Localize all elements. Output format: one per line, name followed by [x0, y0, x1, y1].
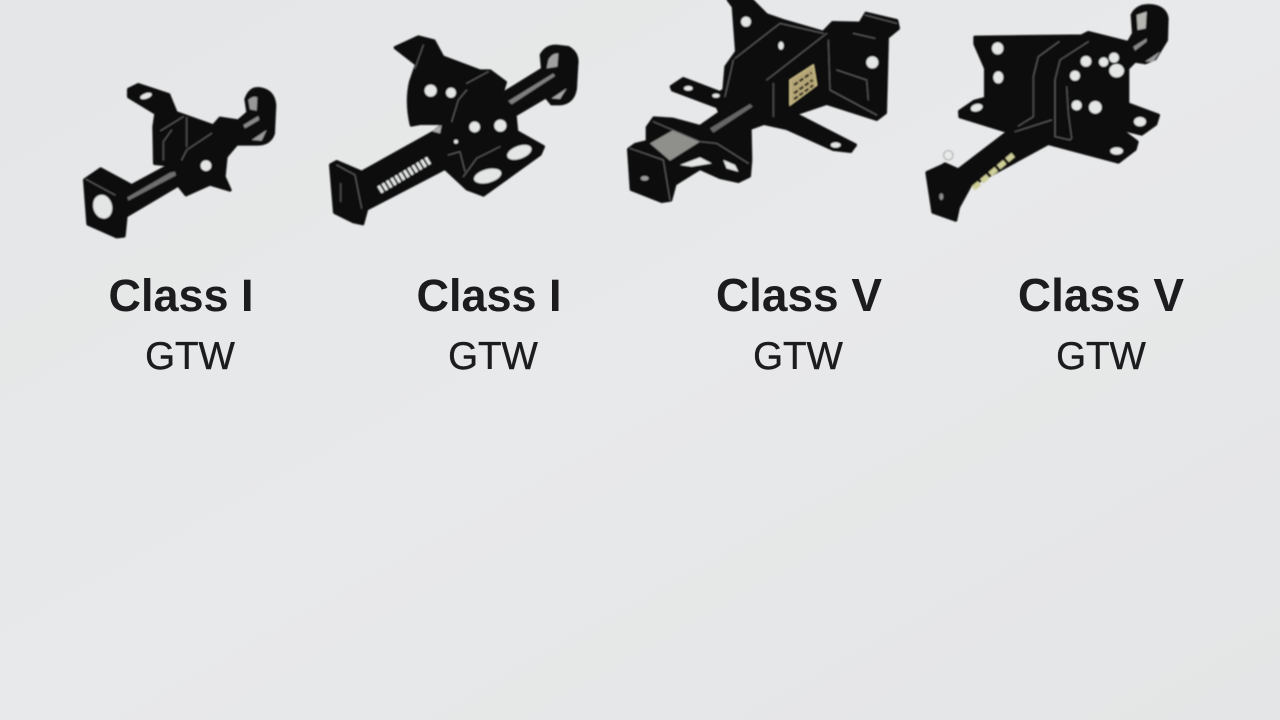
- heading: Class I: Class I: [108, 270, 254, 321]
- icon: small receiver hitch: [85, 85, 275, 237]
- icon: receiver hitch with large mounting plate: [927, 6, 1167, 220]
- label: GTW: GTW: [448, 335, 539, 378]
- icon: receiver hitch with perforated plate: [331, 37, 577, 224]
- label: GTW: GTW: [145, 335, 236, 378]
- panel: Class V plate hitch: [927, 6, 1184, 378]
- panel: Class I plated hitch: [331, 37, 577, 378]
- label: GTW: GTW: [1056, 335, 1147, 378]
- heading: Class V: Class V: [1018, 269, 1184, 321]
- panel: Class I small hitch: [85, 85, 275, 378]
- heading: Class V: Class V: [716, 269, 882, 321]
- icon: heavy duty receiver hitch with gold label: [629, 0, 898, 201]
- panel: Class V bracket hitch: [629, 0, 898, 378]
- badge: gold product label: [790, 65, 817, 105]
- heading: Class I: Class I: [416, 270, 562, 321]
- label: GTW: GTW: [753, 335, 844, 378]
